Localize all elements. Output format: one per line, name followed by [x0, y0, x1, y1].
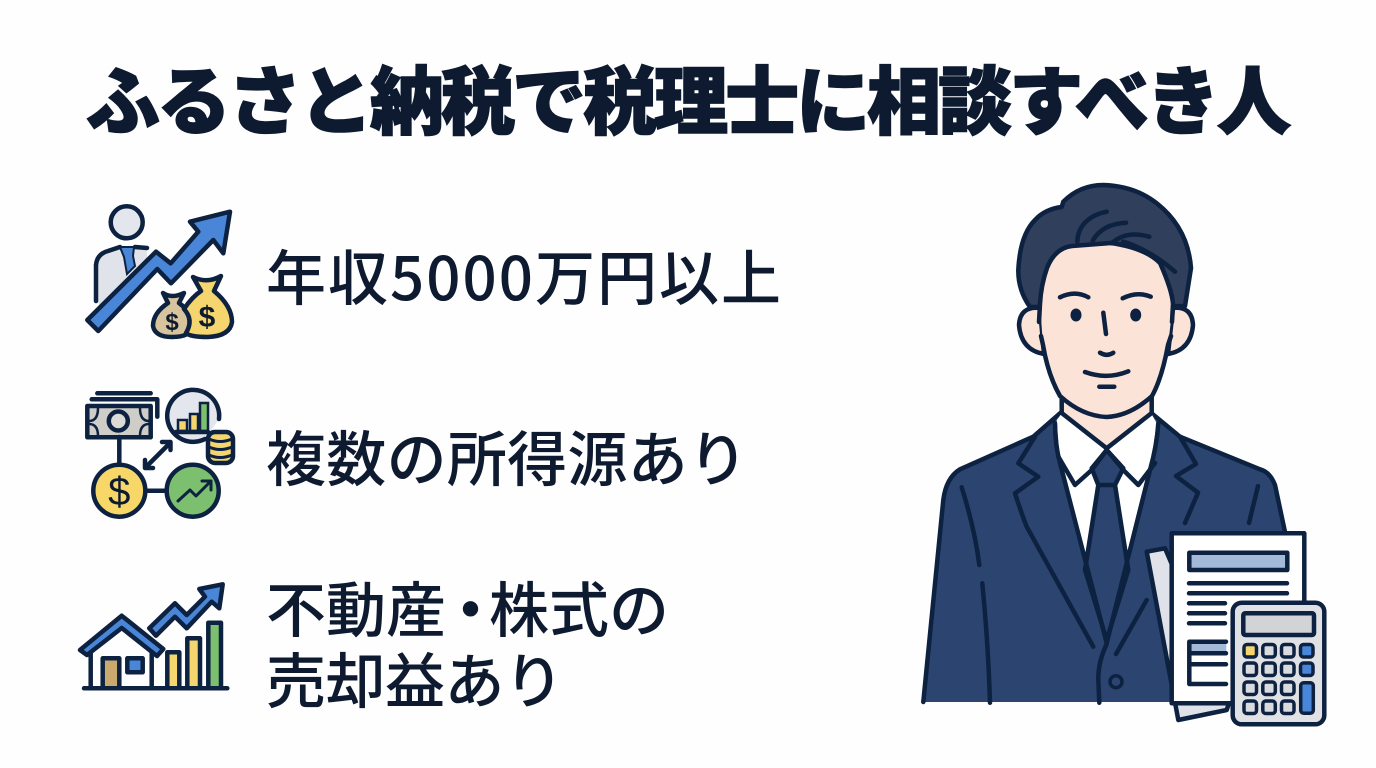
calculator keys: [1244, 644, 1313, 714]
small money bag: $: [165, 309, 179, 336]
ears: [1019, 308, 1193, 354]
item text: real estate and stock gains: 不動産: [266, 563, 446, 650]
hair back: [1018, 185, 1191, 307]
rising arrow: [87, 212, 230, 331]
document: [1172, 533, 1304, 703]
double arrow: [145, 442, 170, 468]
coin stack: [208, 432, 233, 463]
nose: [1100, 313, 1113, 355]
item text: income: 年収5000万円以上: [266, 231, 781, 318]
icon: house and rising bars: [80, 584, 227, 688]
eyes: [1070, 308, 1141, 322]
illustration: tax accountant: [923, 185, 1324, 724]
rising arrow: [149, 584, 223, 636]
icon: multiple income sources: [87, 390, 233, 517]
growth coin: [167, 465, 219, 517]
dollar coin: $: [108, 470, 130, 514]
dollar coin: [93, 465, 145, 517]
collar: [1058, 450, 1155, 485]
calculator screen: [1243, 613, 1314, 635]
jacket front edges: [1055, 423, 1158, 643]
item text: income sources: 複数の所得源あり: [266, 412, 748, 499]
item text: real estate and stock gains: [266, 563, 669, 721]
hair strands: [1077, 212, 1175, 272]
bars: [167, 623, 221, 688]
button: [1110, 676, 1122, 688]
chart circle: [167, 390, 219, 442]
lapels: [1015, 437, 1198, 647]
icon: businessperson with rising arrow and money bags: [87, 206, 232, 337]
connector lines: [119, 437, 167, 491]
title: ふるさと納税で税理士に相談すべき人: [86, 43, 1291, 150]
item text: real estate and stock gains: ・: [440, 563, 500, 650]
eyebrows: [1060, 294, 1151, 298]
large money bag: $: [199, 301, 216, 334]
back paper: [1147, 548, 1230, 720]
ground line: [84, 686, 227, 691]
banknote: [87, 393, 157, 437]
shirt: [1057, 413, 1157, 566]
jacket seams: [962, 486, 1258, 703]
item text: real estate and stock gains: 株式の: [489, 563, 669, 650]
large money bag: [184, 276, 232, 337]
mouth: [1085, 371, 1128, 387]
person icon: [96, 206, 147, 305]
face: [1040, 243, 1173, 417]
item text: real estate and stock gains: 売却益あり: [266, 634, 564, 721]
small money bag: [153, 293, 193, 337]
jacket: [923, 413, 1285, 702]
neck: [1062, 392, 1152, 448]
house: [80, 616, 163, 688]
calculator: [1233, 603, 1324, 724]
necktie: [1085, 450, 1128, 640]
